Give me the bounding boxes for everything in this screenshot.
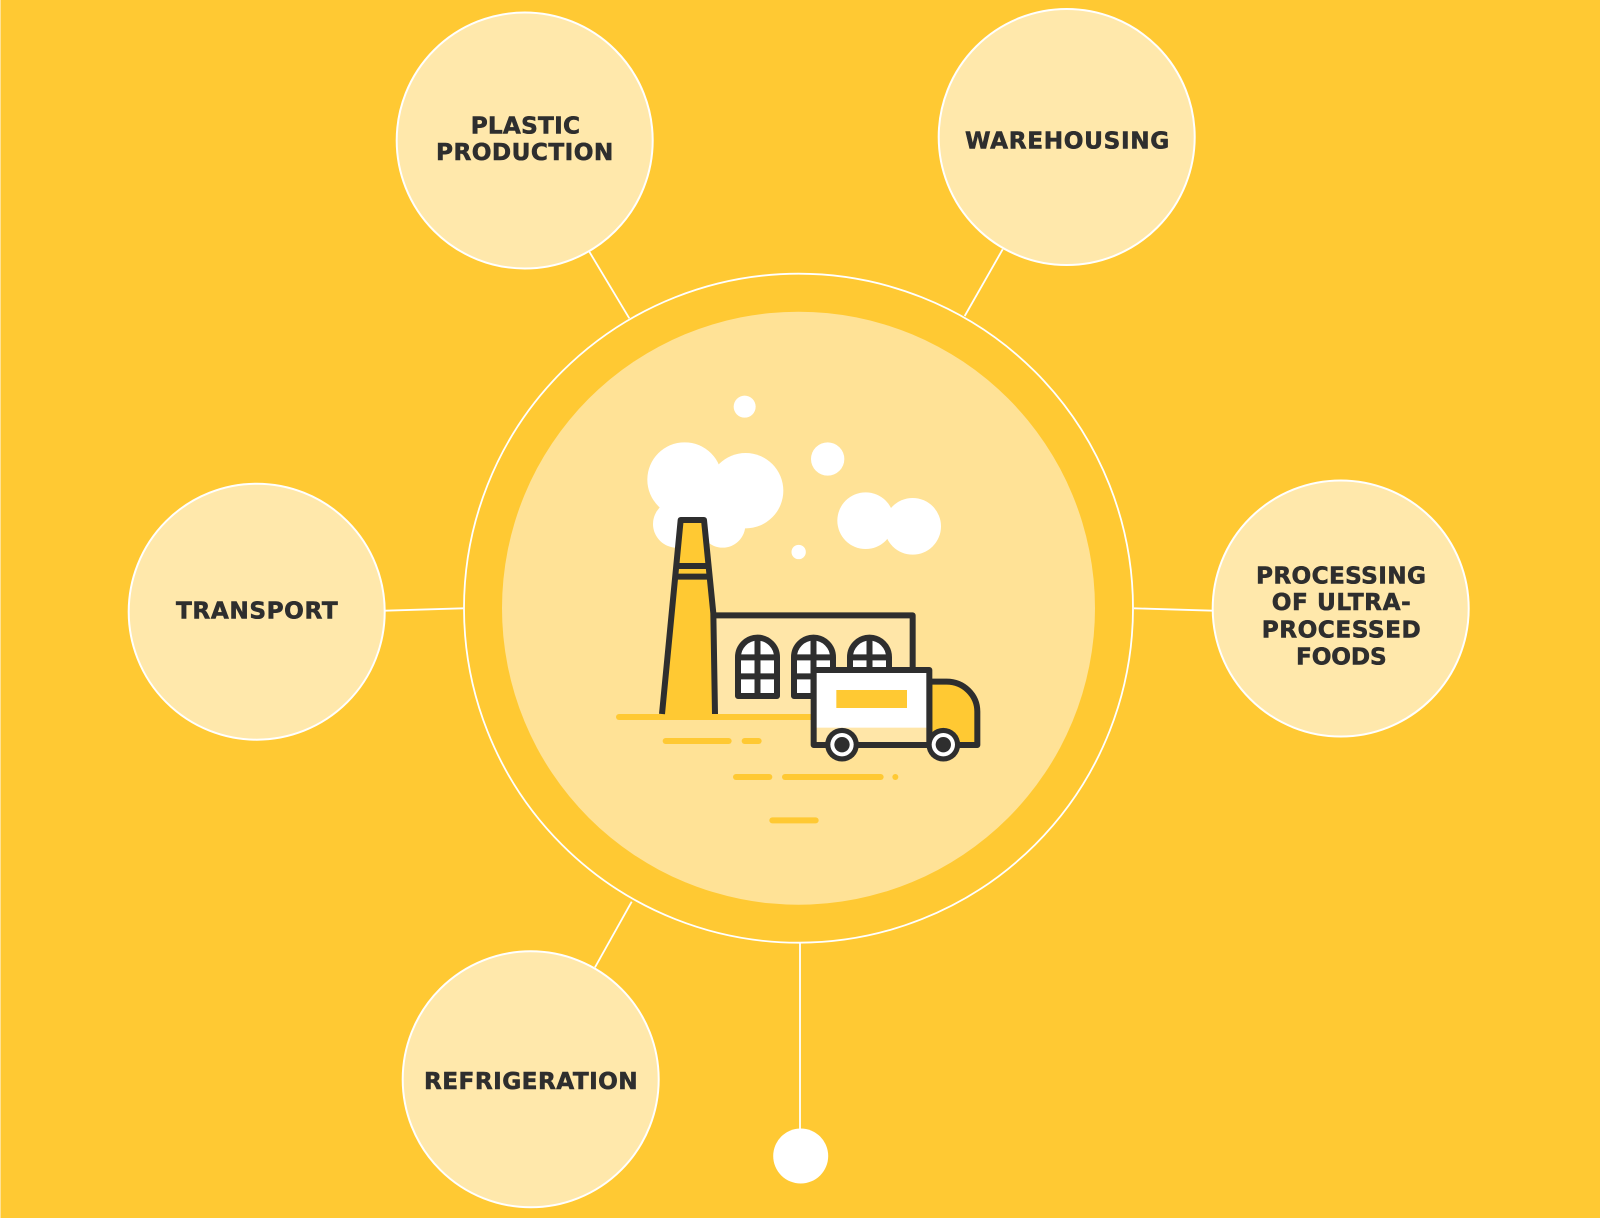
label: warehousing: WAREHOUSING — [965, 127, 1169, 154]
chimney — [662, 520, 715, 714]
central hub inner disc — [502, 312, 1095, 905]
connector: processing — [1134, 608, 1213, 611]
truck cargo box — [814, 670, 929, 745]
connector: plastic production — [589, 252, 629, 318]
label: processing of ultra-processed foods: PROCESSED — [1262, 616, 1421, 643]
label: plastic production: PRODUCTION — [436, 139, 613, 166]
truck wheels — [825, 728, 960, 761]
connector: transport — [385, 608, 463, 611]
connector: bottom dot — [799, 943, 801, 1132]
node: bottom white dot — [773, 1128, 828, 1184]
node: refrigeration — [403, 951, 659, 1207]
truck cab — [929, 682, 977, 745]
label: processing of ultra-processed foods: PROCESSING — [1256, 562, 1426, 589]
node: warehousing — [939, 9, 1195, 265]
connector: refrigeration — [595, 902, 632, 967]
factory building — [715, 615, 913, 714]
node: plastic production — [397, 12, 653, 268]
node: processing of ultra-processed foods — [1213, 480, 1469, 736]
label: transport: TRANSPORT — [176, 597, 338, 624]
label: plastic production: PLASTIC — [471, 112, 580, 139]
label: processing of ultra-processed foods: FOODS — [1296, 644, 1387, 671]
label: refrigeration: REFRIGERATION — [424, 1068, 638, 1095]
smoke clouds — [647, 396, 941, 559]
factory windows — [738, 638, 889, 696]
icon: factory and delivery truck — [619, 396, 977, 820]
label: processing of ultra-processed foods: OF ULTRA- — [1272, 589, 1411, 616]
ground and road dashes — [619, 717, 895, 820]
node: transport — [129, 484, 385, 740]
central hub outer ring — [464, 274, 1133, 943]
connector: warehousing — [965, 249, 1003, 316]
